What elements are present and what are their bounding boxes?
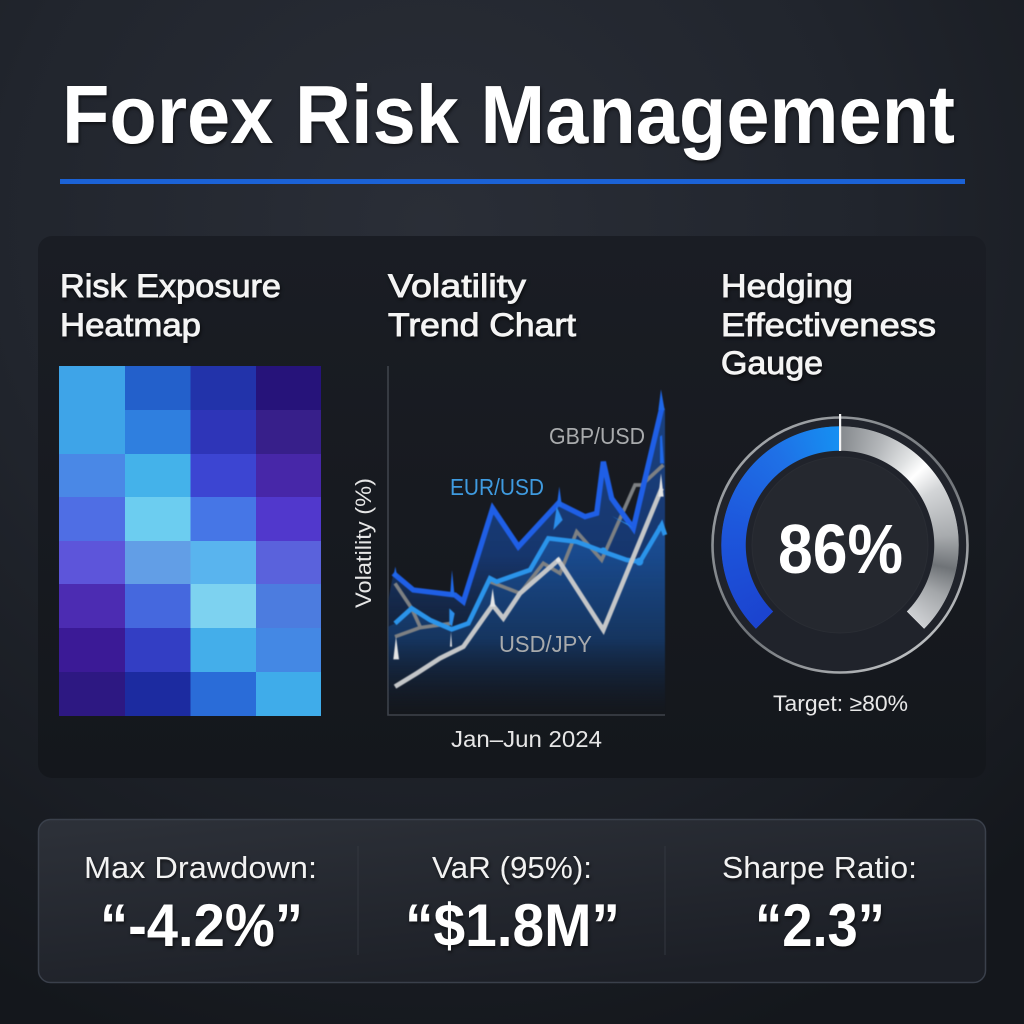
heading: hedging effectiveness gauge: Effectiveness: [721, 307, 936, 343]
metric: value at risk: VaR (95%):: [432, 850, 592, 885]
metric: max drawdown: “-4.2%”: [100, 892, 303, 959]
heading: risk exposure heatmap: Heatmap: [60, 307, 201, 343]
heatmap grid: [59, 366, 321, 716]
panel: key metrics: [38, 820, 986, 982]
gauge target label: Target: ≥80%: [773, 691, 908, 716]
label: GBP/USD: GBP/USD: [549, 423, 645, 449]
series: USD/JPY: [393, 473, 664, 687]
y axis label: Volatility (%): [351, 478, 376, 608]
area under EUR/USD band: [388, 408, 665, 713]
metric: sharpe ratio: [722, 850, 917, 959]
gauge: hedging effectiveness 86%: 86%: [778, 510, 903, 588]
series: dark blue: [393, 389, 665, 602]
heading: hedging effectiveness gauge: Gauge: [721, 345, 823, 381]
series: GBP/USD: [395, 465, 663, 637]
series: light blue: [395, 507, 665, 629]
title underline: [60, 179, 965, 184]
gauge: hedging effectiveness 86%: [711, 414, 969, 674]
line chart series: [388, 389, 665, 713]
title: Forex Risk Management: [62, 68, 955, 161]
metric: sharpe ratio: “2.3”: [755, 892, 885, 959]
heading: volatility trend chart: [388, 268, 576, 343]
metric: max drawdown: Max Drawdown:: [84, 850, 317, 885]
metric: sharpe ratio: Sharpe Ratio:: [722, 850, 917, 885]
heading: volatility trend chart: Volatility: [388, 268, 527, 304]
heading: hedging effectiveness gauge: Hedging: [721, 268, 853, 304]
metric: max drawdown: [84, 850, 317, 959]
heading: hedging effectiveness gauge: [721, 268, 936, 381]
area under light blue series: [388, 525, 665, 713]
metric: value at risk: [405, 850, 620, 959]
heading: risk exposure heatmap: Risk Exposure: [60, 268, 281, 304]
label: USD/JPY: USD/JPY: [499, 631, 592, 657]
chart axes: [388, 366, 665, 715]
panel: risk exposure heatmap: [59, 268, 321, 716]
heading: volatility trend chart: Trend Chart: [388, 307, 576, 343]
panel: volatility trend chart: [351, 268, 665, 752]
heading: risk exposure heatmap: [60, 268, 281, 343]
label: EUR/USD: EUR/USD: [450, 474, 544, 500]
panel: main charts: [38, 236, 986, 778]
metric: value at risk: “$1.8M”: [405, 892, 620, 959]
x axis label: Jan–Jun 2024: [451, 726, 602, 752]
